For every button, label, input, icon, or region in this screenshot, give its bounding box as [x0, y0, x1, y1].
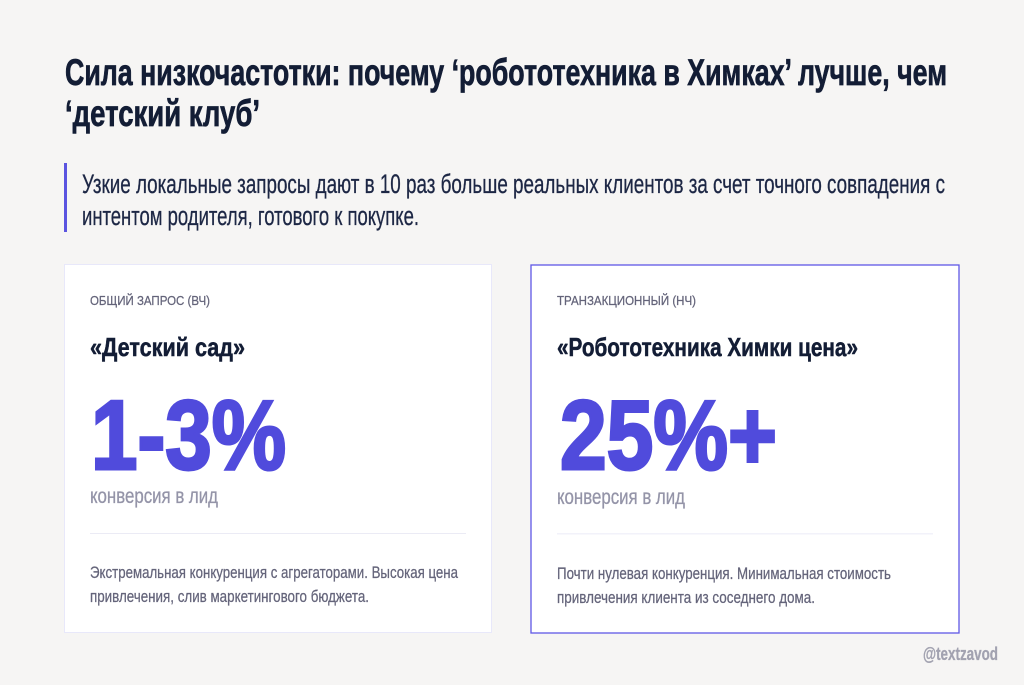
- subtitle callout: интентом родителя, готового к покупке.: [82, 201, 419, 231]
- description: Экстремальная конкуренция с агрегаторами. Высокая цена: [90, 564, 459, 582]
- metric caption: конверсия в лид: [557, 486, 685, 509]
- panel: transactional query: [531, 265, 959, 633]
- panel: broad query: [64, 264, 492, 632]
- description: [90, 564, 459, 606]
- subtitle callout: [64, 163, 945, 232]
- query heading: «Детский сад»: [90, 332, 245, 362]
- brand handle: @textzavod: [923, 644, 998, 664]
- category label: ТРАНЗАКЦИОННЫЙ (НЧ): [557, 293, 696, 308]
- description: [557, 565, 891, 607]
- big number: 25%+: [560, 380, 777, 490]
- big number: 1-3%: [91, 380, 286, 490]
- description: привлечения клиента из соседнего дома.: [557, 589, 815, 607]
- description: привлечения, слив маркетингового бюджета.: [90, 588, 369, 606]
- query heading: «Робототехника Химки цена»: [557, 332, 858, 362]
- title: ‘детский клуб’: [65, 93, 260, 134]
- title: [65, 52, 947, 134]
- metric caption: конверсия в лид: [90, 485, 218, 508]
- category label: ОБЩИЙ ЗАПРОС (ВЧ): [90, 293, 210, 308]
- description: Почти нулевая конкуренция. Минимальная стоимость: [557, 565, 891, 583]
